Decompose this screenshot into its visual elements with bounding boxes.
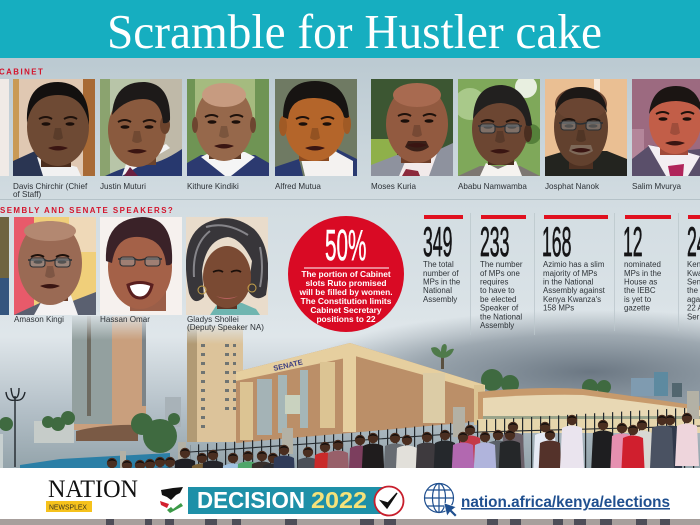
portrait: Davis Chirchir (13, 79, 95, 199)
low building (34, 421, 74, 443)
callout: 50 percent (288, 216, 404, 332)
portrait: Davis Chirchir: of Staff) (13, 190, 41, 199)
stat: 12: 12 (623, 218, 643, 265)
portrait: Alfred Mutua: Alfred Mutua (275, 182, 321, 191)
section: speakers (0, 206, 268, 332)
stat: 12: the IEBC (624, 286, 656, 295)
stat: 168: in the National (543, 278, 594, 286)
callout: 50 percent: slots Ruto promised (306, 278, 386, 288)
logo: Nation Newsplex: NEWSPLEX (49, 502, 87, 512)
callout: 50 percent: The portion of Cabinet (301, 269, 391, 279)
callout: 50 percent: will be filled by women. (298, 287, 393, 297)
stat: 233 (480, 215, 526, 330)
bottom strip (0, 519, 700, 525)
stat: 233: 233 (480, 218, 509, 265)
portrait: Salim Mvurya (632, 79, 700, 191)
stat: 233: Assembly (480, 321, 514, 330)
sign: senate: SENATE (272, 357, 304, 373)
stat: 349: Assembly (423, 295, 457, 304)
stat: 12: House as (624, 278, 657, 286)
stat: 12 (623, 215, 671, 313)
banner: Decision 2022: 2022 (311, 487, 367, 513)
stat: 24 (687, 215, 700, 322)
portrait: Hassan Omar (100, 217, 182, 324)
banner: Decision 2022: DECISION (197, 487, 305, 513)
title banner: Scramble for Hustler cake (107, 4, 602, 59)
portrait: Moses Kuria: Moses Kuria (371, 182, 416, 191)
stat: 24: Ser (687, 312, 700, 322)
stat: 168 (542, 215, 608, 313)
stat: 233: The number (480, 260, 523, 269)
queue of people (100, 413, 699, 513)
callout: 50 percent: 50% (325, 222, 366, 270)
icon: globe (424, 484, 457, 517)
stat: 12: nominated (624, 260, 661, 269)
stat: 12: gazette (624, 304, 650, 313)
banner: Decision 2022 (188, 487, 388, 514)
heading: speakers: SEMBLY AND SENATE SPEAKERS? (0, 206, 174, 215)
stat: 233: of MPs one (480, 269, 521, 278)
stat: 168: Assembly against (543, 286, 606, 295)
callout: 50 percent: Cabinet Secretary (310, 305, 382, 315)
stat: 168: majority of MPs (543, 269, 597, 278)
link: nation.africa/kenya/elections (461, 494, 670, 511)
portrait: Justin Muturi: Justin Muturi (100, 182, 146, 191)
portrait: Josphat Nanok: Josphat Nanok (545, 182, 600, 191)
portrait: Gladys Shollei: Gladys Shollei (187, 315, 239, 324)
portrait: Kithure Kindiki: Kithure Kindiki (187, 182, 239, 191)
stat: 12: is yet to (624, 295, 652, 304)
callout: 50 percent: The Constitution limits (301, 296, 392, 306)
section: cabinet (0, 68, 700, 199)
portrait: Hassan Omar: Hassan Omar (100, 315, 150, 324)
portrait: Alfred Mutua (275, 79, 357, 191)
trees (0, 369, 611, 453)
senate tower (187, 322, 243, 442)
footer bar (0, 468, 700, 519)
low wing (478, 388, 700, 433)
stat: 349: 349 (423, 218, 452, 265)
lamp post (6, 388, 25, 467)
portrait: Davis Chirchir: Davis Chirchir (Chief (13, 182, 88, 191)
title banner (0, 0, 700, 59)
partial portrait at left edge (0, 79, 9, 176)
distant tower (165, 397, 181, 427)
portrait: Amason Kingi: Amason Kingi (14, 315, 64, 324)
sky (0, 300, 700, 468)
portrait: Salim Mvurya: Salim Mvurya (632, 182, 682, 191)
stat: 349: MPs in the (423, 278, 461, 286)
coat of arms (285, 395, 300, 414)
distant skyline (631, 372, 682, 397)
portrait: Kithure Kindiki (187, 79, 269, 191)
portrait: Josphat Nanok (545, 79, 627, 191)
stat: 233: to have to (480, 286, 515, 295)
stat: 233: the National (480, 312, 522, 322)
stat: 233: be elected (480, 295, 516, 304)
portrait: Ababu Namwamba: Ababu Namwamba (458, 182, 527, 191)
logo: Nation Newsplex: NATION (48, 476, 138, 503)
stat: 24: the (687, 286, 699, 295)
heading: cabinet: CABINET (0, 68, 44, 76)
stat: 349: National (423, 286, 452, 295)
palm tree (431, 344, 454, 369)
stat: 12: MPs in the (624, 269, 662, 278)
stat: 233: requires (480, 278, 509, 286)
portrait: Amason Kingi (14, 217, 96, 324)
portrait: Gladys Shollei (186, 217, 268, 332)
bottom photo: senate and queue (0, 300, 700, 513)
portrait: Ababu Namwamba (454, 76, 541, 191)
stat: 168: 168 (542, 218, 571, 265)
icon: check mark (374, 486, 404, 516)
icon: Kenya map (160, 487, 183, 513)
stat dividers (470, 213, 679, 335)
divider (0, 198, 700, 201)
stat: 233: Speaker of (480, 304, 519, 313)
portrait: Justin Muturi (100, 79, 182, 191)
portrait: Gladys Shollei: (Deputy Speaker NA) (187, 323, 264, 332)
stat: 349: The total (423, 260, 454, 269)
stone pillars (120, 391, 699, 468)
fence (190, 408, 700, 468)
senate building (236, 343, 485, 443)
stat: 24: aga (687, 295, 700, 304)
callout: 50 percent: positions to 22 (316, 314, 376, 324)
portrait: Moses Kuria (371, 79, 453, 191)
stat: 349: number of (423, 269, 459, 278)
blue hoarding (20, 453, 170, 468)
partial portrait at left edge (0, 217, 9, 315)
stat: 349 (423, 215, 463, 304)
stat: 168: Kenya Kwanza's (543, 295, 601, 304)
left tower (72, 312, 146, 441)
stat: 168: 158 MPs (543, 304, 574, 313)
stat: 168: Azimio has a slim (543, 260, 605, 269)
